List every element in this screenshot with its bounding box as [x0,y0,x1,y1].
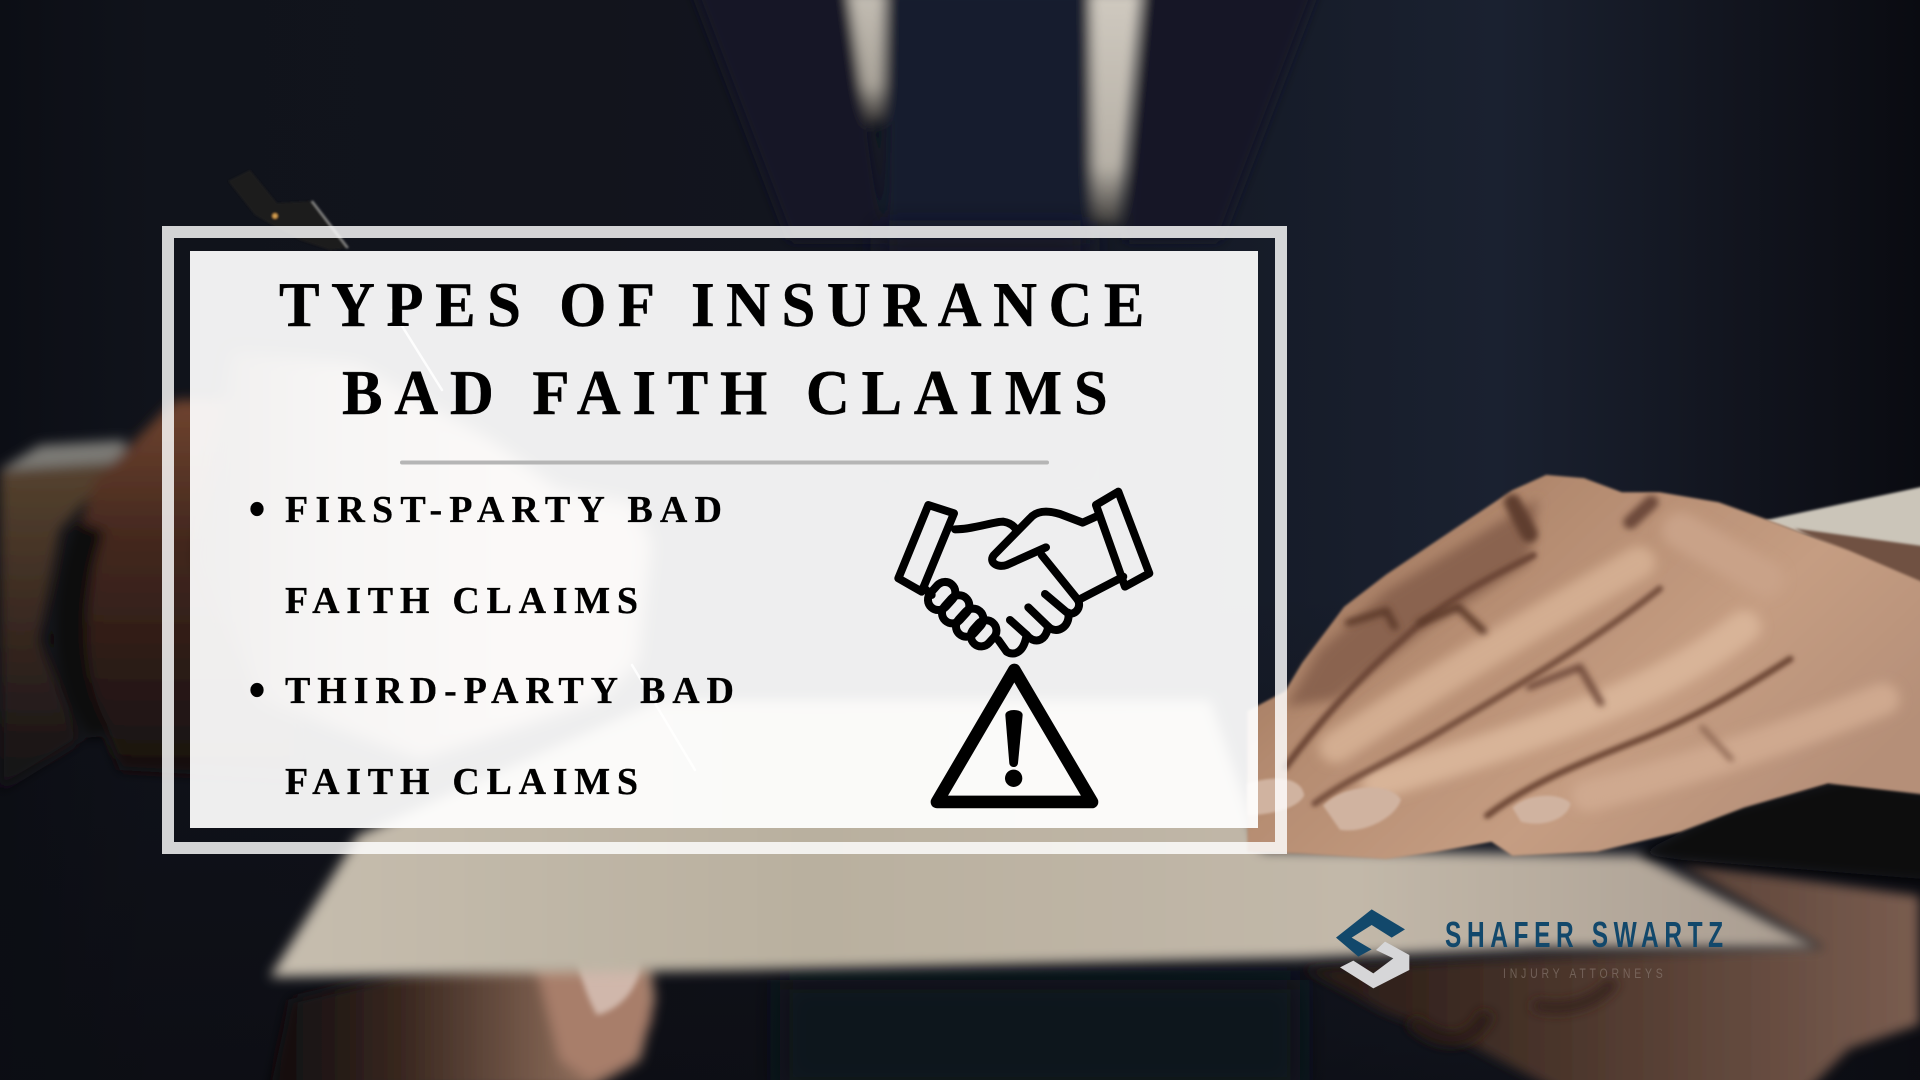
highlights [1336,530,1883,796]
shadow [1639,779,1920,880]
logo wordmark: SHAFER SWARTZ [1445,914,1723,955]
reflection of right hand [1302,864,1920,1080]
bullet: first-party: FAITH CLAIMS [285,580,638,622]
bullet: third-party [250,670,734,803]
finger creases [1285,555,1790,816]
bullet: first-party: FIRST-PARTY BAD [285,489,722,531]
title: BAD FAITH CLAIMS [342,357,1108,428]
index finger shade [1285,498,1538,707]
hand ghost under panel [200,351,652,760]
bullet list [250,489,734,803]
lower left fist [270,960,655,1080]
nail on lower thumb [575,955,640,1015]
bullet: third-party: THIRD-PARTY BAD [285,670,734,712]
frame: outer translucent border [168,232,1281,848]
divider under title [400,460,1049,464]
pen ghost strokes on panel [392,310,695,770]
document [270,700,1820,977]
title [279,269,1144,428]
title: TYPES OF INSURANCE [279,269,1144,340]
logo tagline: INJURY ATTORNEYS [1503,966,1663,981]
icon: warning triangle [937,670,1092,802]
right hand [1247,475,1920,880]
tie and shirt [690,0,1320,240]
logo mark [1336,909,1409,988]
pen [228,170,348,250]
bullet: third-party: FAITH CLAIMS [285,761,638,803]
bullet: first-party [250,489,722,622]
logo: Shafer Swartz [1336,909,1723,988]
panel: translucent white content card [190,251,1258,828]
hand body [1247,475,1920,859]
knuckle wrinkles [1348,502,1731,759]
fingernails [1247,779,1571,830]
left cuff and left hand [0,400,300,790]
icon: handshake [898,492,1149,653]
shirt cuff [1765,486,1920,554]
